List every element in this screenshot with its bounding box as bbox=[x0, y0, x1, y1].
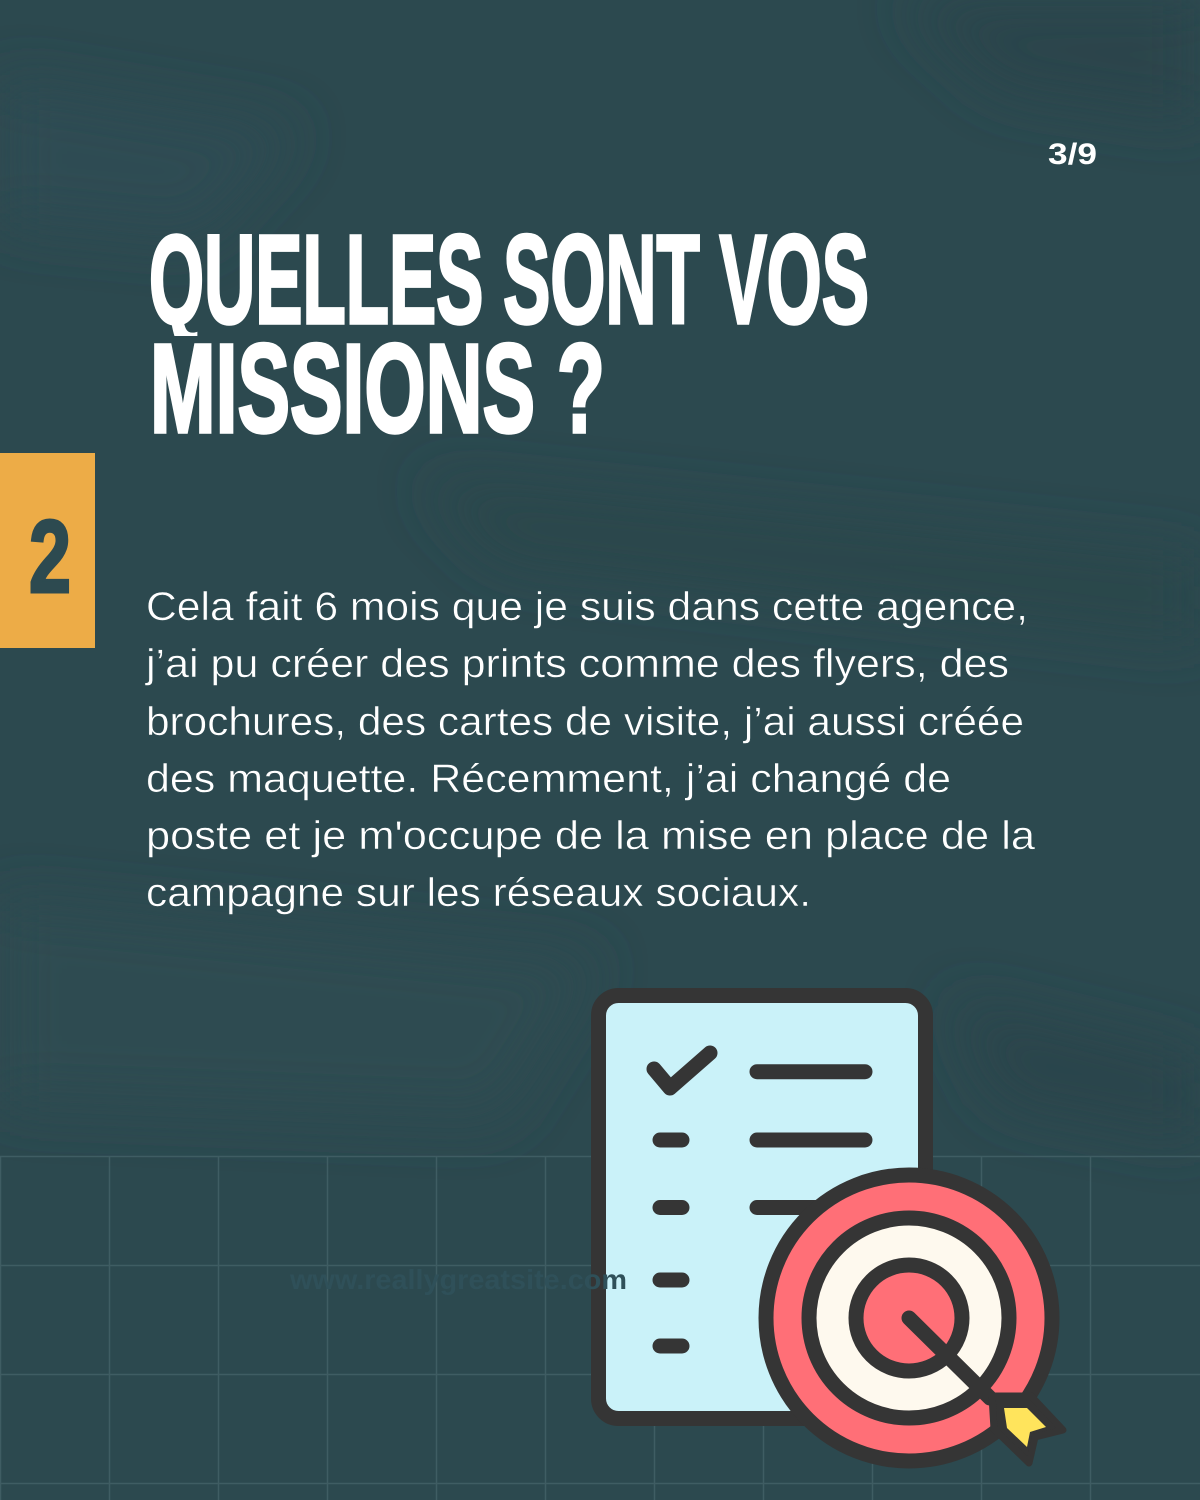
background grid bbox=[0, 1156, 1200, 1500]
body text: Cela fait 6 mois que je suis dans cette agence, bbox=[146, 585, 1028, 629]
icon: checklist and target bbox=[598, 996, 1063, 1463]
body text: campagne sur les réseaux sociaux. bbox=[146, 871, 811, 915]
body text: brochures, des cartes de visite, j’ai aussi créée bbox=[146, 700, 1024, 744]
website watermark: www.reallygreatsite.com bbox=[289, 1264, 627, 1295]
arrow fletching bbox=[992, 1396, 1063, 1463]
title: MISSIONS ? bbox=[150, 318, 605, 459]
checklist document bbox=[598, 996, 926, 1418]
body text bbox=[145, 585, 1036, 915]
page number: 3/9 bbox=[1048, 138, 1097, 171]
body text: des maquette. Récemment, j’ai changé de bbox=[146, 757, 951, 801]
number badge: 2 bbox=[29, 499, 71, 614]
body text: j’ai pu créer des prints comme des flyers, des bbox=[145, 642, 1009, 686]
body text: poste et je m'occupe de la mise en place de la bbox=[146, 814, 1036, 858]
number badge bbox=[0, 453, 95, 648]
target bbox=[766, 1175, 1052, 1461]
title bbox=[150, 232, 868, 435]
